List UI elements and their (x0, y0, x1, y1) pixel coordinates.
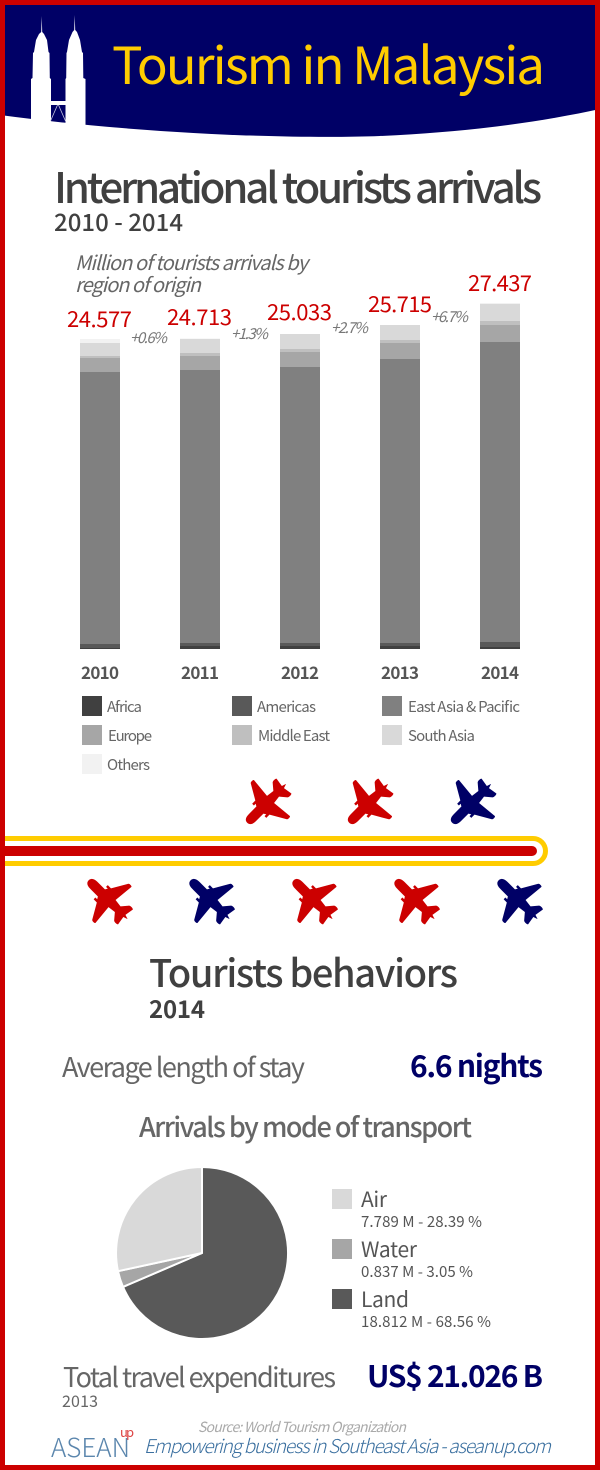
year axis labels (81, 659, 519, 684)
pie legend: 7.789 M - 28.39 % (361, 1211, 482, 1232)
stat: average length of stay (62, 1042, 543, 1086)
runway bar (0, 846, 537, 856)
year axis labels: 2014 (481, 659, 519, 684)
bar value labels: 24.713 (167, 300, 232, 332)
chart legend: East Asia & Pacific (408, 696, 520, 717)
pie legend: Air (361, 1184, 388, 1214)
growth percentages: +0.6% (130, 327, 168, 348)
footer (51, 1417, 552, 1465)
stat: average length of stay: 6.6 nights (410, 1042, 543, 1086)
pie legend: 0.837 M - 3.05 % (361, 1261, 473, 1282)
footer: Empowering business in Southeast Asia - aseanup.com (144, 1432, 552, 1459)
logo: ASEAN up: ASEAN (51, 1428, 130, 1465)
stat: total travel expenditures (62, 1352, 543, 1412)
pie legend: Water (361, 1234, 418, 1264)
pie chart (116, 1167, 288, 1339)
icon: plane bottom row 1 (70, 862, 146, 938)
footer: Source: World Tourism Organization (198, 1417, 407, 1437)
stat: average length of stay: Average length of stay (62, 1046, 305, 1085)
heading: international tourists arrivals: 2010 - 2014 (54, 203, 183, 238)
bar 2010 (80, 339, 120, 649)
year axis labels: 2012 (281, 659, 319, 684)
stat: total travel expenditures: Total travel expenditures (63, 1356, 336, 1395)
bar value labels (67, 266, 532, 334)
icon: plane top row 3 (434, 765, 510, 841)
bar 2011 (180, 338, 220, 649)
bar value labels: 25.715 (368, 287, 432, 319)
logo: ASEAN up: up (120, 1422, 134, 1441)
pie legend (332, 1184, 491, 1332)
header banner (0, 0, 600, 137)
bar 2013 (380, 325, 420, 649)
stat: total travel expenditures: 2013 (62, 1388, 98, 1412)
year axis labels: 2010 (81, 659, 119, 684)
pie legend: Land (361, 1284, 409, 1314)
chart legend: Others (107, 754, 150, 775)
divider: planes and runway (0, 765, 556, 938)
bar value labels: 25.033 (267, 295, 332, 327)
chart legend (82, 696, 520, 775)
icon: plane bottom row 2 (172, 862, 248, 938)
growth percentages: +1.3% (231, 323, 269, 344)
icon: plane bottom row 4 (377, 862, 453, 938)
heading: international tourists arrivals: International tourists arrivals (54, 155, 542, 216)
chart subtitle (75, 247, 311, 298)
bar 2012 (280, 334, 320, 649)
growth percentages: +6.7% (431, 306, 469, 327)
icon: Petronas towers (31, 15, 86, 130)
chart subtitle: region of origin (75, 269, 202, 298)
year axis labels: 2011 (181, 659, 219, 684)
chart legend: Middle East (258, 725, 330, 746)
bar 2014 (480, 303, 520, 649)
heading: tourists behaviors: 2014 (149, 990, 205, 1025)
icon: plane top row 2 (331, 765, 407, 841)
runway outline (0, 838, 546, 864)
icon: plane bottom row 5 (480, 862, 556, 938)
stacked bar chart (67, 266, 532, 684)
bar value labels: 27.437 (468, 266, 532, 298)
chart legend: South Asia (408, 725, 475, 746)
icon: plane bottom row 3 (275, 862, 351, 938)
heading: arrivals by mode of transport: Arrivals by mode of transport (139, 1106, 472, 1145)
chart subtitle: Million of tourists arrivals by (75, 247, 311, 276)
chart legend: Africa (107, 696, 142, 717)
heading: tourists behaviors (149, 943, 458, 1025)
icon: plane top row 1 (229, 765, 305, 841)
bar value labels: 24.577 (67, 302, 132, 334)
growth percentages: +2.7% (331, 317, 369, 338)
title: Tourism in Malaysia (112, 25, 545, 99)
heading: tourists behaviors: Tourists behaviors (149, 943, 458, 998)
year axis labels: 2013 (381, 659, 419, 684)
stat: total travel expenditures: US$ 21.026 B (367, 1352, 543, 1396)
chart legend: Americas (257, 696, 316, 717)
pie legend: 18.812 M - 68.56 % (361, 1311, 491, 1332)
growth percentages (130, 306, 469, 348)
chart legend: Europe (108, 725, 152, 746)
